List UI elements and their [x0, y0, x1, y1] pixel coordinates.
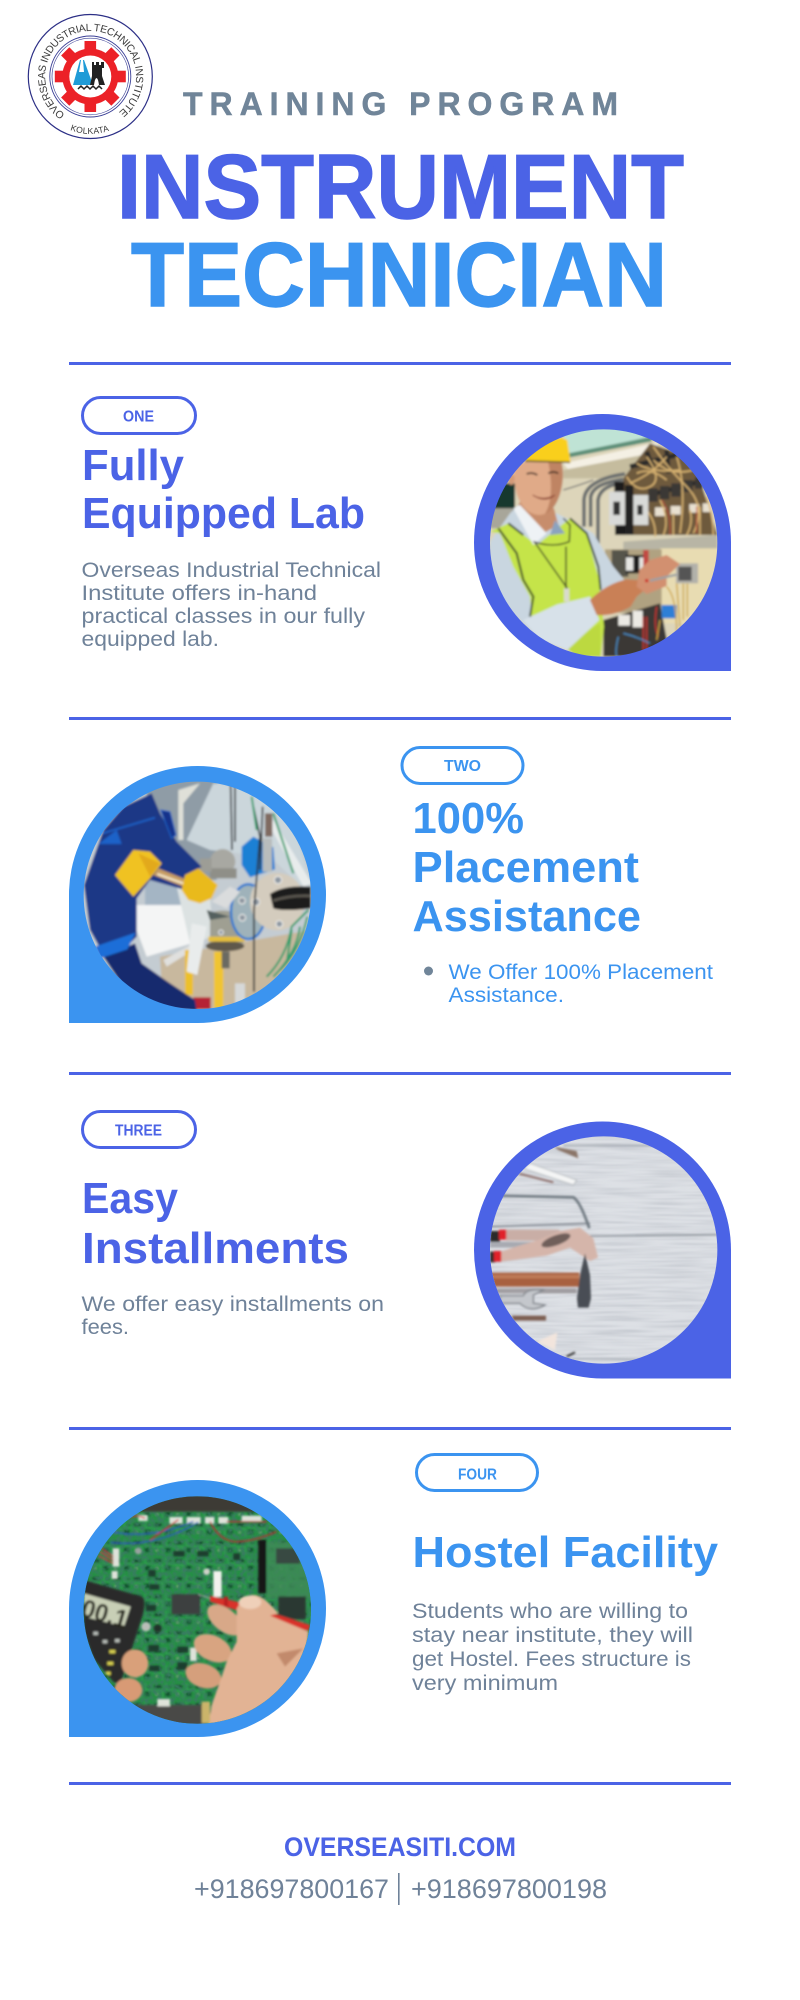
heading: easy installments [82, 1175, 349, 1273]
heading: easy installments: Installments [82, 1225, 349, 1273]
pill: one: ONE [123, 408, 154, 426]
text block: hostel description: very minimum [412, 1671, 558, 1695]
footer: website: OVERSEASITI.COM [284, 1832, 516, 1862]
heading: easy installments: Easy [82, 1175, 178, 1223]
text block: lab description [82, 558, 381, 651]
logo: Overseas Industrial Technical Institute seal: KOLKATA [70, 124, 110, 134]
bullet list: placement offer: We Offer 100% Placement [448, 960, 713, 984]
title line: technician: TECHNICIAN [131, 225, 667, 326]
bullet list: placement offer [424, 960, 713, 1007]
footer: phone numbers: +918697800167 [194, 1874, 389, 1904]
pill: two [402, 748, 523, 784]
text block: hostel description [412, 1599, 693, 1695]
photo: multimeter probing circuit board: 00.1 [78, 1595, 131, 1634]
heading: fully equipped lab [82, 442, 365, 538]
text block: installments description [82, 1292, 384, 1339]
heading: 100% placement assistance [412, 795, 641, 941]
photo: technician at control panel [490, 429, 718, 657]
photo: multimeter probing circuit board [84, 1496, 311, 1724]
text block: hostel description: stay near institute, they will [412, 1623, 693, 1647]
heading: fully equipped lab: Fully [82, 442, 184, 490]
pill: three [82, 1112, 196, 1148]
drop shape: sky blue frame [69, 1480, 326, 1737]
subtitle: training program: TRAINING PROGRAM [183, 86, 618, 122]
heading: hostel facility: Hostel Facility [412, 1529, 718, 1577]
panel: four, hostel facility [69, 1454, 718, 1737]
heading: 100% placement assistance: Assistance [412, 893, 641, 941]
drop shape: sky blue frame [69, 766, 326, 1023]
photo: worker tightening valve with wrench [84, 782, 311, 1009]
text block: hostel description: get Hostel. Fees structure is [412, 1647, 691, 1671]
logo: Overseas Industrial Technical Institute seal [28, 14, 153, 140]
title line: instrument: INSTRUMENT [117, 137, 684, 238]
panel: three, easy installments [82, 1112, 731, 1378]
photo: hand tools on grey wood [490, 1136, 718, 1364]
pill: four [416, 1454, 538, 1490]
pill: one [82, 398, 196, 434]
text block: lab description: Institute offers in-hand [82, 581, 317, 605]
footer: phone numbers: +918697800198 [411, 1874, 607, 1904]
heading: fully equipped lab: Equipped Lab [82, 490, 365, 538]
pill: four: FOUR [458, 1466, 497, 1484]
drop shape: blue frame [474, 414, 731, 671]
panel: one, fully equipped lab [82, 398, 731, 671]
heading: 100% placement assistance: 100% [412, 795, 524, 843]
pill: three: THREE [115, 1122, 162, 1140]
text block: installments description: We offer easy installments on [82, 1292, 384, 1316]
pill: two: TWO [444, 758, 481, 775]
text block: lab description: practical classes in our fully [82, 604, 365, 628]
heading: 100% placement assistance: Placement [412, 844, 639, 892]
text block: lab description: Overseas Industrial Technical [82, 558, 381, 582]
text block: lab description: equipped lab. [82, 627, 219, 651]
bullet list: placement offer: Assistance. [448, 983, 564, 1007]
text block: installments description: fees. [82, 1315, 129, 1339]
panel: two, placement assistance [69, 748, 713, 1023]
logo: Overseas Industrial Technical Institute seal: OVERSEAS INDUSTRIAL TECHNICAL INSTITUTE [38, 24, 144, 118]
text block: hostel description: Students who are willing to [412, 1599, 688, 1623]
footer: phone numbers [194, 1873, 607, 1905]
drop shape: blue frame [474, 1122, 731, 1378]
